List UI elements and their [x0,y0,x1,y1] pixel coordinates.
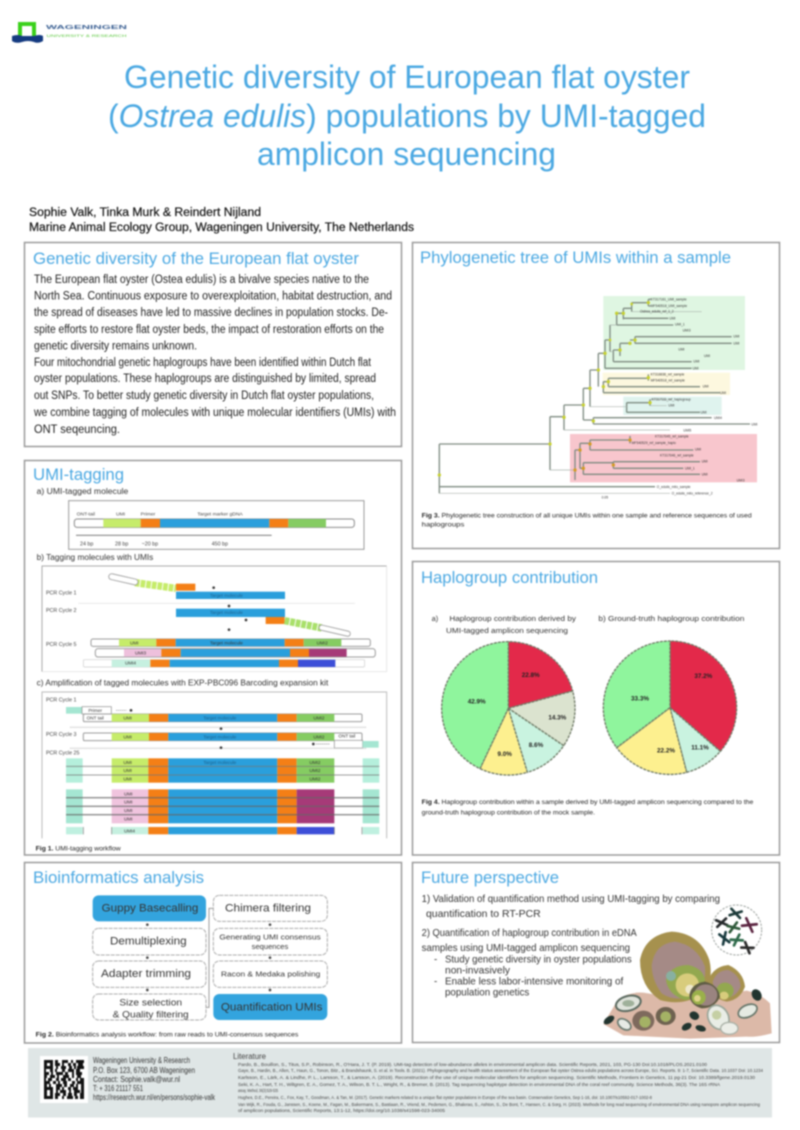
diagram: UMI-tagged molecule and tagging: Target molecule [210,610,243,615]
diagram: amplification with barcoding expansion kit: UMI2 [309,776,321,781]
diagram: UMI-tagged molecule and tagging: UMI [130,640,139,645]
diagram: UMI-tagged molecule and tagging: 24 bp [80,541,93,547]
text block: introduction: Four mitochondrial genetic haplogroups have been identified within Dutch flat [34,357,372,369]
authors and affiliation: Marine Animal Ecology Group, Wageningen University, The Netherlands [29,222,414,234]
text block: introduction: we combine tagging of molecules with unique molecular identifiers (UMIs) with [33,407,396,419]
text block: future perspective: samples using UMI-tagged amplicon sequencing [422,943,630,954]
text block: introduction: genetic diversity remains unknown. [34,340,197,352]
title [108,59,706,172]
diagram: UMI-tagged molecule and tagging: UMI3 [135,650,147,655]
chart: pie charts: 22.2% [657,748,675,755]
chart: phylogenetic tree: UMI [751,422,758,426]
chart: pie charts: 33.3% [631,695,649,702]
chart: phylogenetic tree: KT317161_UMI_sample [651,297,687,301]
diagram: UMI-tagged molecule and tagging: ONT-tail [77,511,95,517]
text block: contact details: P.O. Box 123, 6700 AB Wageningen [93,1066,195,1075]
diagram: UMI-tagged molecule and tagging: PCR Cycle 1 [46,591,77,597]
chart: pie charts: 9.0% [497,751,512,758]
heading: UMI-tagging: UMI-tagging [33,465,124,484]
heading: bioinformatics analysis: Bioinformatics analysis [33,868,204,887]
flowchart: analysis workflow: Size selection [119,997,182,1007]
caption: figure 4: ground-truth haplogroup contribution of the mock sample. [422,810,595,817]
heading: future perspective: Future perspective [421,868,559,887]
diagram: amplification with barcoding expansion kit: Target molecule [203,716,237,721]
logo: Wageningen University & Research: WAGENINGEN [46,25,127,31]
diagram: amplification with barcoding expansion kit: UMI [124,808,133,813]
chart: phylogenetic tree: UMI_1 [675,322,685,326]
chart: phylogenetic tree: UMI_1 [685,466,695,470]
illustration: oysters on a reef with eDNA circle [602,905,772,1039]
chart: phylogenetic tree: UMI4 [714,416,722,420]
diagram: UMI-tagged molecule and tagging: b) Tagging molecules with UMIs [37,553,153,562]
caption: figure 4 [422,799,754,817]
chart: phylogenetic tree: UMI [669,316,676,320]
chart: phylogenetic tree: KT317046_ref_sample [660,454,694,458]
text block: introduction: the spread of diseases have led to massive declines in population stocks. De- [34,307,388,319]
chart: phylogenetic tree: UMI [720,391,726,395]
diagram: UMI-tagged molecule and tagging: 450 bp [212,541,228,547]
text block: literature references: assay, Method, 36(3):529-535 [238,1088,278,1093]
chart: phylogenetic tree: MF540518_UMI_sample [651,304,687,308]
footer panel: contact and literature [28,1048,772,1118]
heading: haplogroup contribution: Haplogroup contribution [421,568,598,587]
diagram: amplification with barcoding expansion kit: UMI [123,735,132,740]
chart: phylogenetic tree: KT317045_ref_sample [655,434,689,438]
text block: future perspective [422,894,720,998]
flowchart: analysis workflow: Quantification UMIs [221,1001,323,1013]
diagram: UMI-tagged molecule and tagging: ~20 bp [142,541,158,547]
text block: literature references: Karlsson, E., Lärk, A. & Lindhe, P. L., Larsson, T., & Larsson, A. (2019). Reconstruction of the use of unique molecular identifiers for amplicon sequencing. Scientific Methods, Frontiers in Genetics, 11 pg-21 Doi: 10.3389/fgene.2019.0130 [238,1075,756,1080]
panel: phylogenetic tree [412,242,780,548]
chart: pie charts: UMI-tagged amplicon sequencing [446,626,568,635]
text block: literature references: Pardo, B., Bouillon, S., Titus, S.P., Robinson, R., O'Hara, J. T. (P. 2019). UMI-tag detection of low-abundance alleles in environmental amplicon data. Scientific Reports, 2021, 103, PG-130 Doi:10.1018/PLOS.2021.0100 [238,1062,708,1067]
diagram: amplification with barcoding expansion kit: PCR Cycle 1 [46,697,77,703]
chart: phylogenetic tree: KT317111_ref_haplogroup [652,397,691,401]
chart: phylogenetic tree: UMI [668,404,675,408]
text block: introduction [33,274,396,436]
text block: introduction: spite efforts to restore flat oyster beds, the impact of restoration efforts on the [34,324,384,336]
chart: pie charts [422,614,754,817]
logo: Wageningen University & Research [12,22,127,43]
flowchart: analysis workflow: sequences [252,942,288,951]
diagram: amplification with barcoding expansion kit: UMI4 [124,828,136,833]
flowchart: analysis workflow [36,895,327,1039]
chart: phylogenetic tree: UMI [678,348,685,352]
diagram: amplification with barcoding expansion kit: UMI [123,760,132,765]
text block: introduction: oyster populations. These haplogroups are distinguished by limited, spread [34,373,376,385]
text block: future perspective: quantification to RT-PCR [426,909,541,920]
chart: phylogenetic tree: UMI [733,341,740,345]
chart: phylogenetic tree [422,296,758,529]
chart: phylogenetic tree: UMI [703,385,709,389]
diagram: UMI-tagged molecule and tagging: Target molecule [210,593,243,598]
diagram: amplification with barcoding expansion kit: Target molecule [203,735,237,740]
diagram: amplification with barcoding expansion kit: UMI [123,716,132,721]
diagram: amplification with barcoding expansion kit: UMI2 [309,760,321,765]
diagram: amplification with barcoding expansion kit: UMI [124,800,133,805]
chart: phylogenetic tree: O_edulis_mito_sample [657,485,691,489]
chart: phylogenetic tree: UMI [701,410,707,414]
text block: contact details: https://research.wur.nl/en/persons/sophie-valk [93,1093,216,1102]
diagram: amplification with barcoding expansion kit: ONT tail [87,716,104,721]
diagram: UMI-tagged molecule and tagging: a) UMI-tagged molecule [37,487,129,496]
chart: phylogenetic tree: MF540529_ref_sample_haplo [632,441,676,445]
text block: contact details [93,1056,216,1102]
text block: future perspective: 2) Quantification of haplogroup contribution in eDNA [422,928,637,939]
chart: phylogenetic tree: Ostrea_edulis_ref_1_2 [640,310,674,314]
diagram: amplification with barcoding expansion kit: PCR Cycle 3 [46,732,77,738]
chart: phylogenetic tree: UMI3 [737,478,745,482]
text block: future perspective: 1) Validation of quantification method using UMI-tagging by comparing [422,894,720,905]
diagram: UMI-tagged molecule and tagging: Target molecule [210,640,243,645]
diagram: amplification with barcoding expansion kit: UMI [124,791,133,796]
diagram: UMI-tagged molecule and tagging: Primer [141,511,156,517]
caption: figure 3 [422,512,752,529]
diagram: UMI-tagged molecule and tagging: 28 bp [115,541,128,547]
flowchart: analysis workflow: Chimera filtering [225,903,311,915]
chart: pie charts: 22.8% [522,672,540,679]
text block: literature references [233,1052,764,1113]
caption: figure 3: Fig 3. Phylogenetic tree construction of all unique UMIs within one sample and reference sequences of used [422,512,752,519]
chart: phylogenetic tree: UMI [733,335,740,339]
pie chart b [603,641,737,774]
caption: figure 4: Fig 4. Haplogroup contribution within a sample derived by UMI-tagged amplicon sequencing compared to the [422,799,754,806]
title: Genetic diversity of European flat oyster [124,59,690,95]
diagram: amplification with barcoding expansion kit [36,679,387,852]
diagram: amplification with barcoding expansion kit: UMI [123,768,132,773]
diagram: UMI-tagged molecule and tagging: Target marker gDNA [197,511,243,517]
diagram: amplification with barcoding expansion kit: Target molecule [203,760,237,765]
logo: Wageningen University & Research: UNIVERSITY & RESEARCH [46,34,127,38]
diagram: UMI-tagged molecule and tagging: PCR Cycle 5 [46,642,77,648]
text block: future perspective: population genetics [445,987,530,998]
diagram: UMI-tagged molecule and tagging: UMI4 [125,661,137,666]
chart: phylogenetic tree: 0.05 [602,495,608,499]
title: (Ostrea edulis) populations by UMI-tagged [108,98,706,134]
chart: phylogenetic tree: UMI [702,472,708,476]
chart: phylogenetic tree: UMI [704,354,710,358]
diagram: amplification with barcoding expansion kit: UMI2 [313,735,325,740]
title: amplicon sequencing [257,136,556,172]
text block: introduction: The European flat oyster (Ostea edulis) is a bivalve species native to the [34,274,369,286]
text block: contact details: Wageningen University & Research [93,1056,190,1065]
text block: future perspective: - [434,954,437,965]
caption: figure 1: Fig 1. UMI-tagging workflow [36,845,121,852]
chart: pie charts: 11.1% [691,744,709,751]
chart: pie charts: 42.9% [468,698,486,705]
chart: phylogenetic tree: MF540518_ref_sample [651,379,685,383]
flowchart: analysis workflow: & Quality filtering [113,1009,189,1019]
authors and affiliation: Sophie Valk, Tinka Murk & Reindert Nijland [29,207,261,219]
diagram: UMI-tagged molecule and tagging: UMI2 [317,640,328,645]
panel: genetic diversity introduction [24,242,402,446]
chart: phylogenetic tree: UMI [693,360,700,364]
text block: literature references: Van Wijk, R., Fouda, G., Janssen, S., Koene, M., Fagan, M., Bakermans, S., Bastiaan, R., Vriend, M., Pedersen, G., Bhalerao, S., Ashton, S., De Bont, T., Hansen, C. & Sorg, H. (2023). Methods for long read sequencing of environmental DNA using nanopore amplicon sequencing [238,1102,761,1107]
diagram: amplification with barcoding expansion kit: Primer [88,708,102,713]
panel: bioinformatics analysis [24,862,402,1043]
chart: pie charts: Haplogroup contribution derived by [449,614,576,623]
chart: phylogenetic tree: UMI [693,366,699,370]
chart: pie charts: a) [432,614,438,623]
pie chart a [442,642,575,775]
diagram: amplification with barcoding expansion kit: UMI2 [309,768,321,773]
panel: haplogroup contribution [412,562,780,855]
text block: literature references: Hughes, D.E., Pereira, C., Fox, Kay, T., Goodman, A. & Tan, M. (2017). Genetic markers related to a unique flat oyster populations in Europe of the sea basin. Conservation Genetics, Sep 1-16, doi: 10.1007/s10592-017-1002-8 [238,1095,653,1100]
diagram: UMI-tagged molecule and tagging: UMI [116,511,125,517]
chart: phylogenetic tree: UMI3 [683,329,691,333]
text block: literature references: Seki, K. A., Hart, T. H., Wiltgren, E. A., Gomez, T. A., Wilson, B. T. L., Wright, R., & Bremer, B. (2013). Tag sequencing haplotype detection in environmental DNA of the coral reef community. Science Methods, 36(3). The 16S rRNA [238,1082,720,1087]
panel: future perspective [412,862,780,1042]
diagram: UMI-tagged molecule and tagging [37,487,387,672]
chart: phylogenetic tree: UMI5 [683,429,691,433]
text block: future perspective: non-invasively [445,966,510,977]
flowchart: analysis workflow: Racon & Medaka polishing [221,969,320,978]
text block: contact details: T: + 316 21117 551 [93,1084,143,1093]
chart: phylogenetic tree: KT318836_ref_sample [651,373,684,377]
text block: introduction: out SNPs. To better study genetic diversity in Dutch flat oyster populations, [34,390,374,402]
text block: introduction: North Sea. Continuous exposure to overexploitation, habitat destruction, and [34,290,392,302]
text block: contact details: Contact: Sophie.valk@wur.nl [93,1075,180,1084]
diagram: amplification with barcoding expansion kit: UMI2 [313,716,325,721]
chart: pie charts: 14.3% [548,714,567,721]
flowchart: analysis workflow: Demultiplexing [110,936,187,948]
text block: future perspective: Enable less labor-intensive monitoring of [445,977,624,988]
text block: literature references: Literature [233,1052,267,1061]
caption: figure 2: Fig 2. Bioinformatics analysis workflow: from raw reads to UMI-consensus sequences [36,1032,299,1039]
diagram: amplification with barcoding expansion kit: UMI [123,776,132,781]
caption: figure 3: haplogroups [422,522,465,529]
chart: pie charts: b) Ground-truth haplogroup contribution [598,614,744,623]
text block: future perspective: - [434,977,437,988]
chart: phylogenetic tree: UMI [695,447,701,451]
panel: UMI-tagging [24,460,402,855]
heading: phylogenetic tree: Phylogenetic tree of UMIs within a sample [420,248,731,267]
diagram: amplification with barcoding expansion kit: PCR Cycle 25 [46,751,79,757]
diagram: amplification with barcoding expansion kit: ONT tail [338,733,355,738]
flowchart: analysis workflow: Guppy Basecalling [102,903,198,915]
icon: QR code [40,1056,88,1103]
chart: phylogenetic tree: O_edulis_mito_reference_2 [672,491,713,495]
chart: pie charts: 8.6% [529,742,544,749]
chart: pie charts: 37.2% [694,673,713,680]
authors and affiliation [29,207,414,234]
text block: future perspective: Study genetic diversity in oyster populations [445,954,632,965]
text block: literature references: of amplicon populations, Scientific Reports, 13:1-12, https://doi.org/10.1038/s41598-023-34005 [238,1108,446,1113]
diagram: UMI-tagged molecule and tagging: PCR Cycle 2 [46,608,77,614]
chart: phylogenetic tree: UMI [702,460,708,464]
text block: literature references: Gaye, B., Hardin, B., Allen, T., Haun, G., Tonon, Bitz., & Brandshaunk, S. et al. in Tools. B. (2021). Phylogeography and health status assessment of the European flat oyster Ostrea edulis populations across Europe, Sci. Reports. 9: 1-7, Scientific Data. 10.1037 Doi: 10.1234 [238,1068,764,1073]
text block: introduction: ONT seqeuncing. [34,424,120,436]
flowchart: analysis workflow: Adapter trimming [101,968,191,980]
diagram: amplification with barcoding expansion kit: UMI [124,817,133,822]
flowchart: analysis workflow: Generating UMI consensus [219,932,321,941]
heading: genetic diversity: Genetic diversity of the European flat oyster [33,249,359,268]
diagram: amplification with barcoding expansion kit: c) Amplification of tagged molecules with EXP-PBC096 Barcoding expansion kit [37,679,329,688]
